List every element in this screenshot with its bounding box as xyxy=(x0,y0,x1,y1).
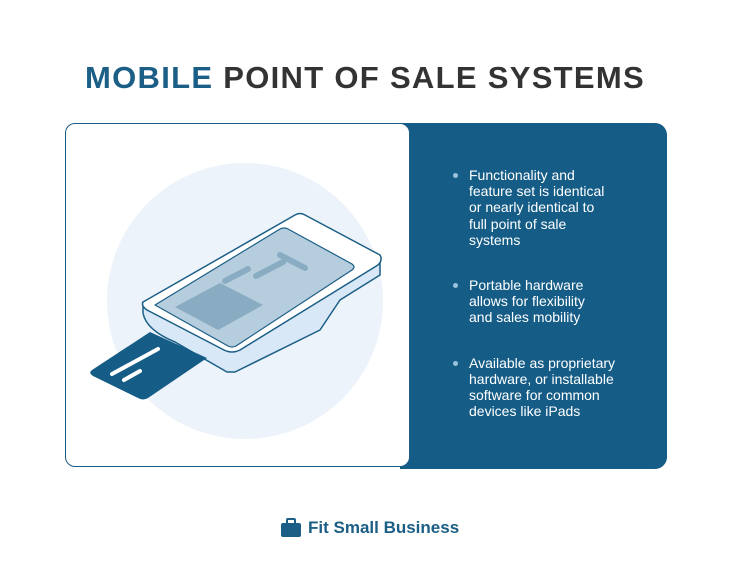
card xyxy=(90,332,206,399)
bullet list: or nearly identical to xyxy=(469,199,594,215)
panel: text xyxy=(400,123,667,469)
logo: Fit Small Business xyxy=(308,518,459,537)
bullet list: systems xyxy=(469,232,520,248)
panel: illustration xyxy=(65,123,410,467)
bullet list: hardware, or installable xyxy=(469,371,614,387)
bullet list: Functionality and xyxy=(469,167,575,183)
bullet list: software for common xyxy=(469,387,600,403)
bullet list: devices like iPads xyxy=(469,403,580,419)
bullet list: Available as proprietary xyxy=(469,355,615,371)
bullet list: Portable hardware xyxy=(469,277,583,293)
illustration: card reader xyxy=(90,163,383,439)
bullet list: feature set is identical xyxy=(469,183,604,199)
title: MOBILE POINT OF SALE SYSTEMS xyxy=(85,60,645,95)
bullet list xyxy=(453,167,615,419)
bullet list: full point of sale xyxy=(469,216,566,232)
bullet list: allows for flexibility xyxy=(469,293,585,309)
bullet list: and sales mobility xyxy=(469,309,580,325)
